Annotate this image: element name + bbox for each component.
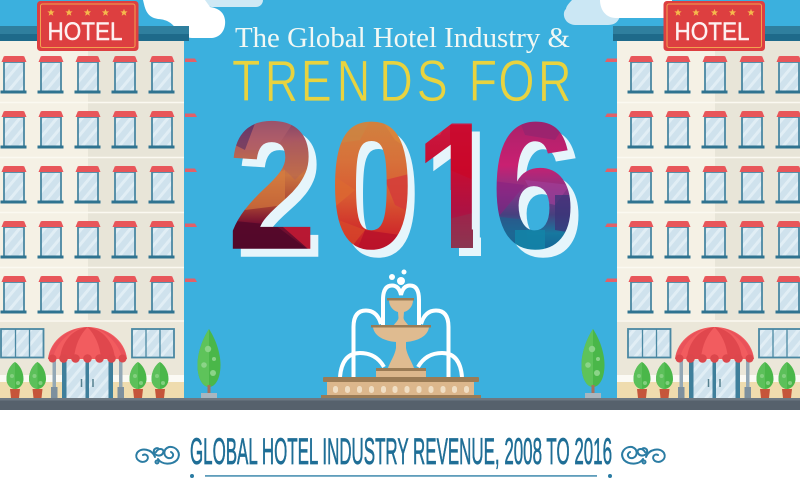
title line 2: TRENDS FOR (232, 49, 572, 114)
digit 0: 0 (329, 85, 414, 287)
hotel sign (37, 1, 138, 51)
right tree (582, 329, 604, 398)
left ornament (136, 447, 179, 464)
ground floor with entrance, canopy and potted plants (628, 327, 800, 398)
water jets (340, 286, 462, 377)
year 2016 (232, 120, 578, 258)
upper windows (628, 56, 800, 314)
right hotel building (605, 1, 800, 398)
road (0, 398, 800, 410)
title line 1: The Global Hotel Industry & (235, 22, 570, 54)
roof (613, 26, 800, 41)
right ornament (622, 447, 665, 464)
cloud: top left (143, 0, 263, 38)
year shadow (240, 132, 578, 258)
side ledges (185, 58, 197, 282)
water bubbles (389, 270, 406, 285)
facade wall (617, 41, 800, 398)
year shadow: 0 (336, 93, 421, 295)
hotel sign (664, 1, 765, 51)
year shadow: 6 (499, 93, 584, 295)
hotel sign: HOTEL (48, 18, 123, 46)
cloud: top right (564, 0, 672, 25)
left tree (198, 329, 220, 398)
digit 1: 1 (415, 85, 500, 287)
digit 2: 2 (228, 85, 316, 287)
ground floor with entrance, canopy and potted plants (1, 327, 174, 398)
upper windows (0, 56, 174, 314)
year shadow: 1 (423, 93, 508, 295)
digit 6: 6 (491, 85, 576, 287)
basin tiers (389, 300, 413, 325)
side ledges (605, 58, 617, 282)
roof (0, 26, 189, 41)
fountain (321, 270, 481, 398)
hotel sign: HOTEL (674, 18, 750, 46)
year shadow: 2 (236, 93, 324, 295)
heading underline (190, 474, 612, 478)
left hotel building (0, 1, 197, 398)
facade wall (0, 41, 184, 398)
